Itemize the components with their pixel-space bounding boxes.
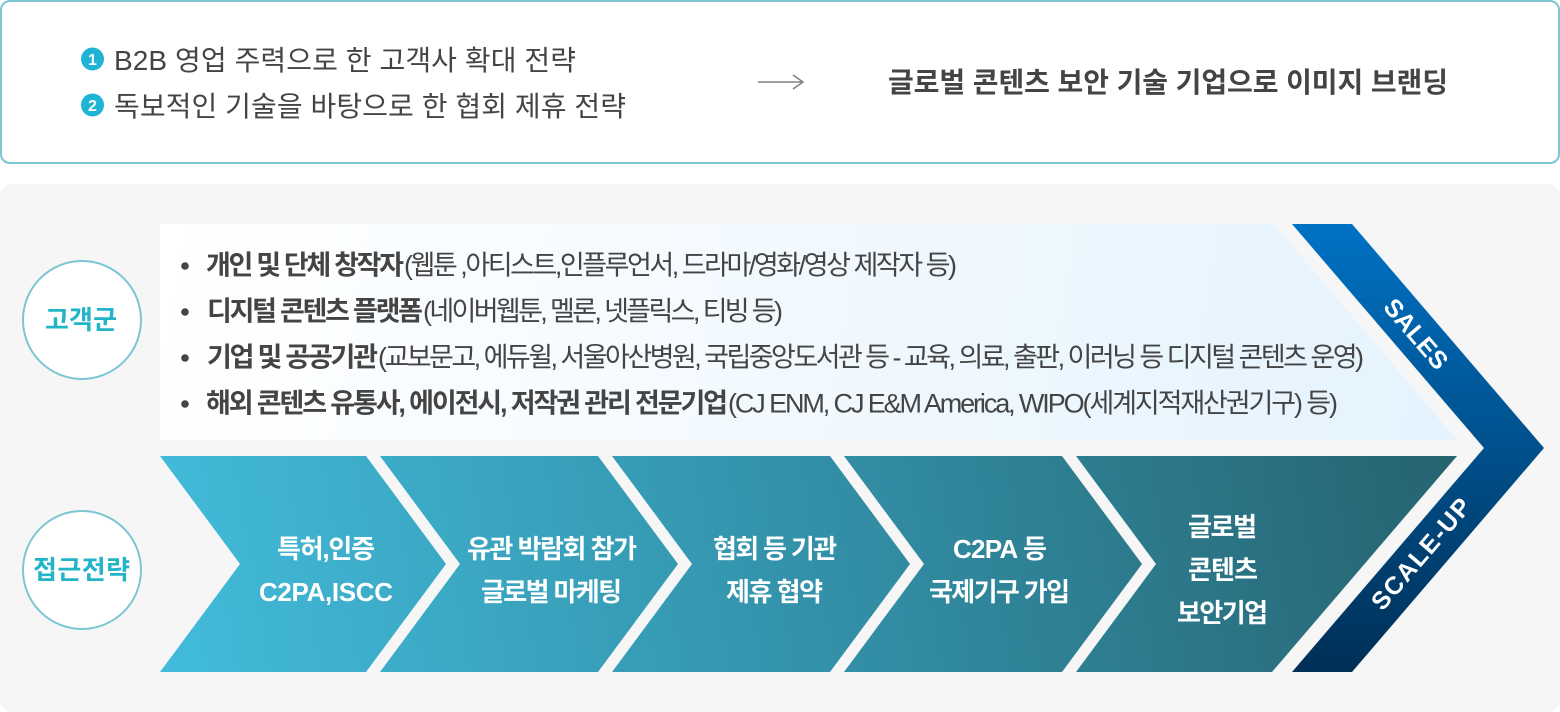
badge: approach strategy	[23, 511, 141, 629]
chevron step 5: 글로벌	[1188, 512, 1257, 542]
chevron step 2: 글로벌 마케팅	[481, 577, 622, 607]
customer item 2: (네이버웹툰, 멜론, 넷플릭스, 티빙 등)	[423, 296, 783, 326]
chevron step 5	[1076, 456, 1457, 672]
positioning statement: 글로벌 콘텐츠 보안 기술 기업으로 이미지 브랜딩	[888, 67, 1448, 98]
chevron step 1: C2PA,ISCC	[259, 577, 393, 607]
panel: positioning summary	[1, 1, 1559, 163]
chevron step 3: 협회 등 기관	[713, 534, 837, 564]
badge: customer group	[23, 261, 141, 379]
customer item 4	[181, 388, 1338, 418]
chevron step 2: 유관 박람회 참가	[467, 534, 637, 564]
customer item 4: (CJ ENM, CJ E&M America, WIPO(세계지적재산권기구) 등)	[728, 388, 1338, 418]
customer item 3: 기업 및 공공기관	[207, 342, 378, 372]
arrow	[758, 75, 803, 89]
customer item 4: 해외 콘텐츠 유통사, 에이전시, 저작권 관리 전문기업	[206, 388, 728, 418]
customer item 2	[181, 296, 783, 326]
numbered strategy 1: B2B 영업 주력으로 한 고객사 확대 전략	[114, 45, 576, 76]
chevron step 4: C2PA 등	[953, 534, 1047, 564]
large chevron: sales and scale-up	[1292, 224, 1544, 672]
chevron step 5: 보안기업	[1177, 598, 1268, 628]
chevron step 3	[612, 456, 910, 672]
numbered strategy 2: 독보적인 기술을 바탕으로 한 협회 제휴 전략	[114, 91, 626, 122]
chevron step 4	[844, 456, 1142, 672]
customer item 3: (교보문고, 에듀윌, 서울아산병원, 국립중앙도서관 등 - 교육, 의료, 출판, 이러닝 등 디지털 콘텐츠 운영)	[378, 342, 1364, 372]
panel: strategy diagram	[0, 184, 1560, 712]
chevron step 3: 제휴 협약	[726, 577, 823, 607]
chevron step 1	[160, 456, 446, 672]
numbered strategy 2: 2	[88, 98, 97, 115]
chevron step 1: 특허,인증	[277, 534, 375, 564]
badge: customer group: 고객군	[45, 305, 117, 335]
chevron step 2	[380, 456, 678, 672]
customer item 1: 개인 및 단체 창작자	[206, 250, 404, 280]
label: scale-up: SCALE-UP	[1366, 493, 1477, 616]
numbered strategy 1: 1	[88, 52, 97, 69]
customer item 2: 디지털 콘텐츠 플랫폼	[207, 296, 423, 326]
chevron step 5: 콘텐츠	[1188, 555, 1258, 585]
badge: approach strategy: 접근전략	[33, 555, 130, 585]
customer item 1: (웹툰 ,아티스트,인플루언서, 드라마/영화/영상 제작자 등)	[404, 250, 957, 280]
banner: customer list	[160, 224, 1457, 440]
chevron step 4: 국제기구 가입	[929, 577, 1070, 607]
label: sales: SALES	[1378, 293, 1454, 375]
